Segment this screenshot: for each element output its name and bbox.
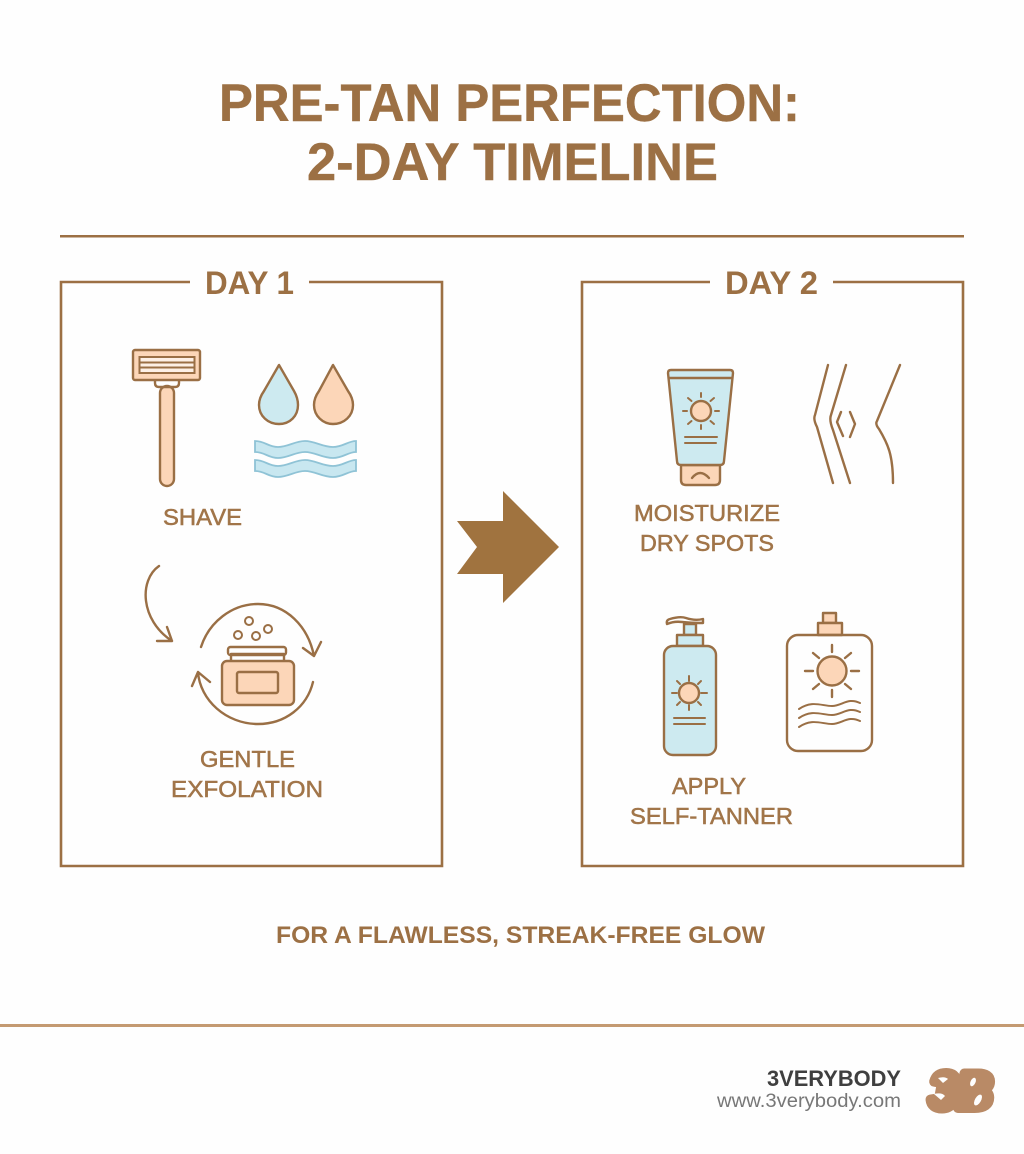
label: apply self-tanner: SELF-TANNER [630, 803, 793, 829]
label: gentle exfoliation: GENTLE [200, 746, 295, 772]
title: PRE-TAN PERFECTION: [219, 74, 800, 133]
panel: day 2 [582, 265, 963, 866]
tagline: FOR A FLAWLESS, STREAK-FREE GLOW [276, 922, 766, 949]
icon: razor [133, 350, 200, 486]
label: moisturize dry spots: DRY SPOTS [640, 530, 774, 556]
title [219, 74, 800, 192]
label: apply self-tanner: APPLY [672, 773, 746, 799]
icon: sunscreen tube [668, 370, 733, 485]
label: moisturize dry spots [634, 500, 780, 556]
footer brand text: 3VERYBODY [767, 1066, 901, 1091]
label: gentle exfoliation: EXFOLATION [171, 776, 323, 802]
panel: day 1 [61, 265, 442, 866]
label: apply self-tanner [630, 773, 793, 829]
icon: exfoliant jar [222, 647, 294, 705]
icon: pump bottle [664, 617, 716, 755]
panel frame: day 2 [582, 282, 963, 866]
heading: day 1: DAY 1 [205, 265, 294, 301]
heading: day 2: DAY 2 [725, 265, 818, 301]
icon: exfoliation cycle arrows [192, 604, 321, 724]
label: gentle exfoliation [171, 746, 323, 802]
panel frame: day 1 [61, 282, 442, 866]
arrow: curved down to exfoliation [146, 566, 172, 641]
title: 2-DAY TIMELINE [307, 133, 718, 192]
footer brand text [716, 1066, 901, 1112]
label: moisturize dry spots: MOISTURIZE [634, 500, 780, 526]
logo: 3B: 3B [930, 1063, 992, 1119]
icon: water drops [259, 365, 353, 424]
icon: exfoliant bubbles [234, 617, 272, 640]
label: shave: SHAVE [163, 504, 242, 530]
icon: water waves [255, 441, 356, 477]
icon: self-tanner spray bottle [787, 613, 872, 751]
arrow: day 1 to day 2 [457, 491, 559, 603]
icon: knees and dry spots [814, 365, 900, 483]
footer brand text: www.3verybody.com [716, 1091, 901, 1112]
